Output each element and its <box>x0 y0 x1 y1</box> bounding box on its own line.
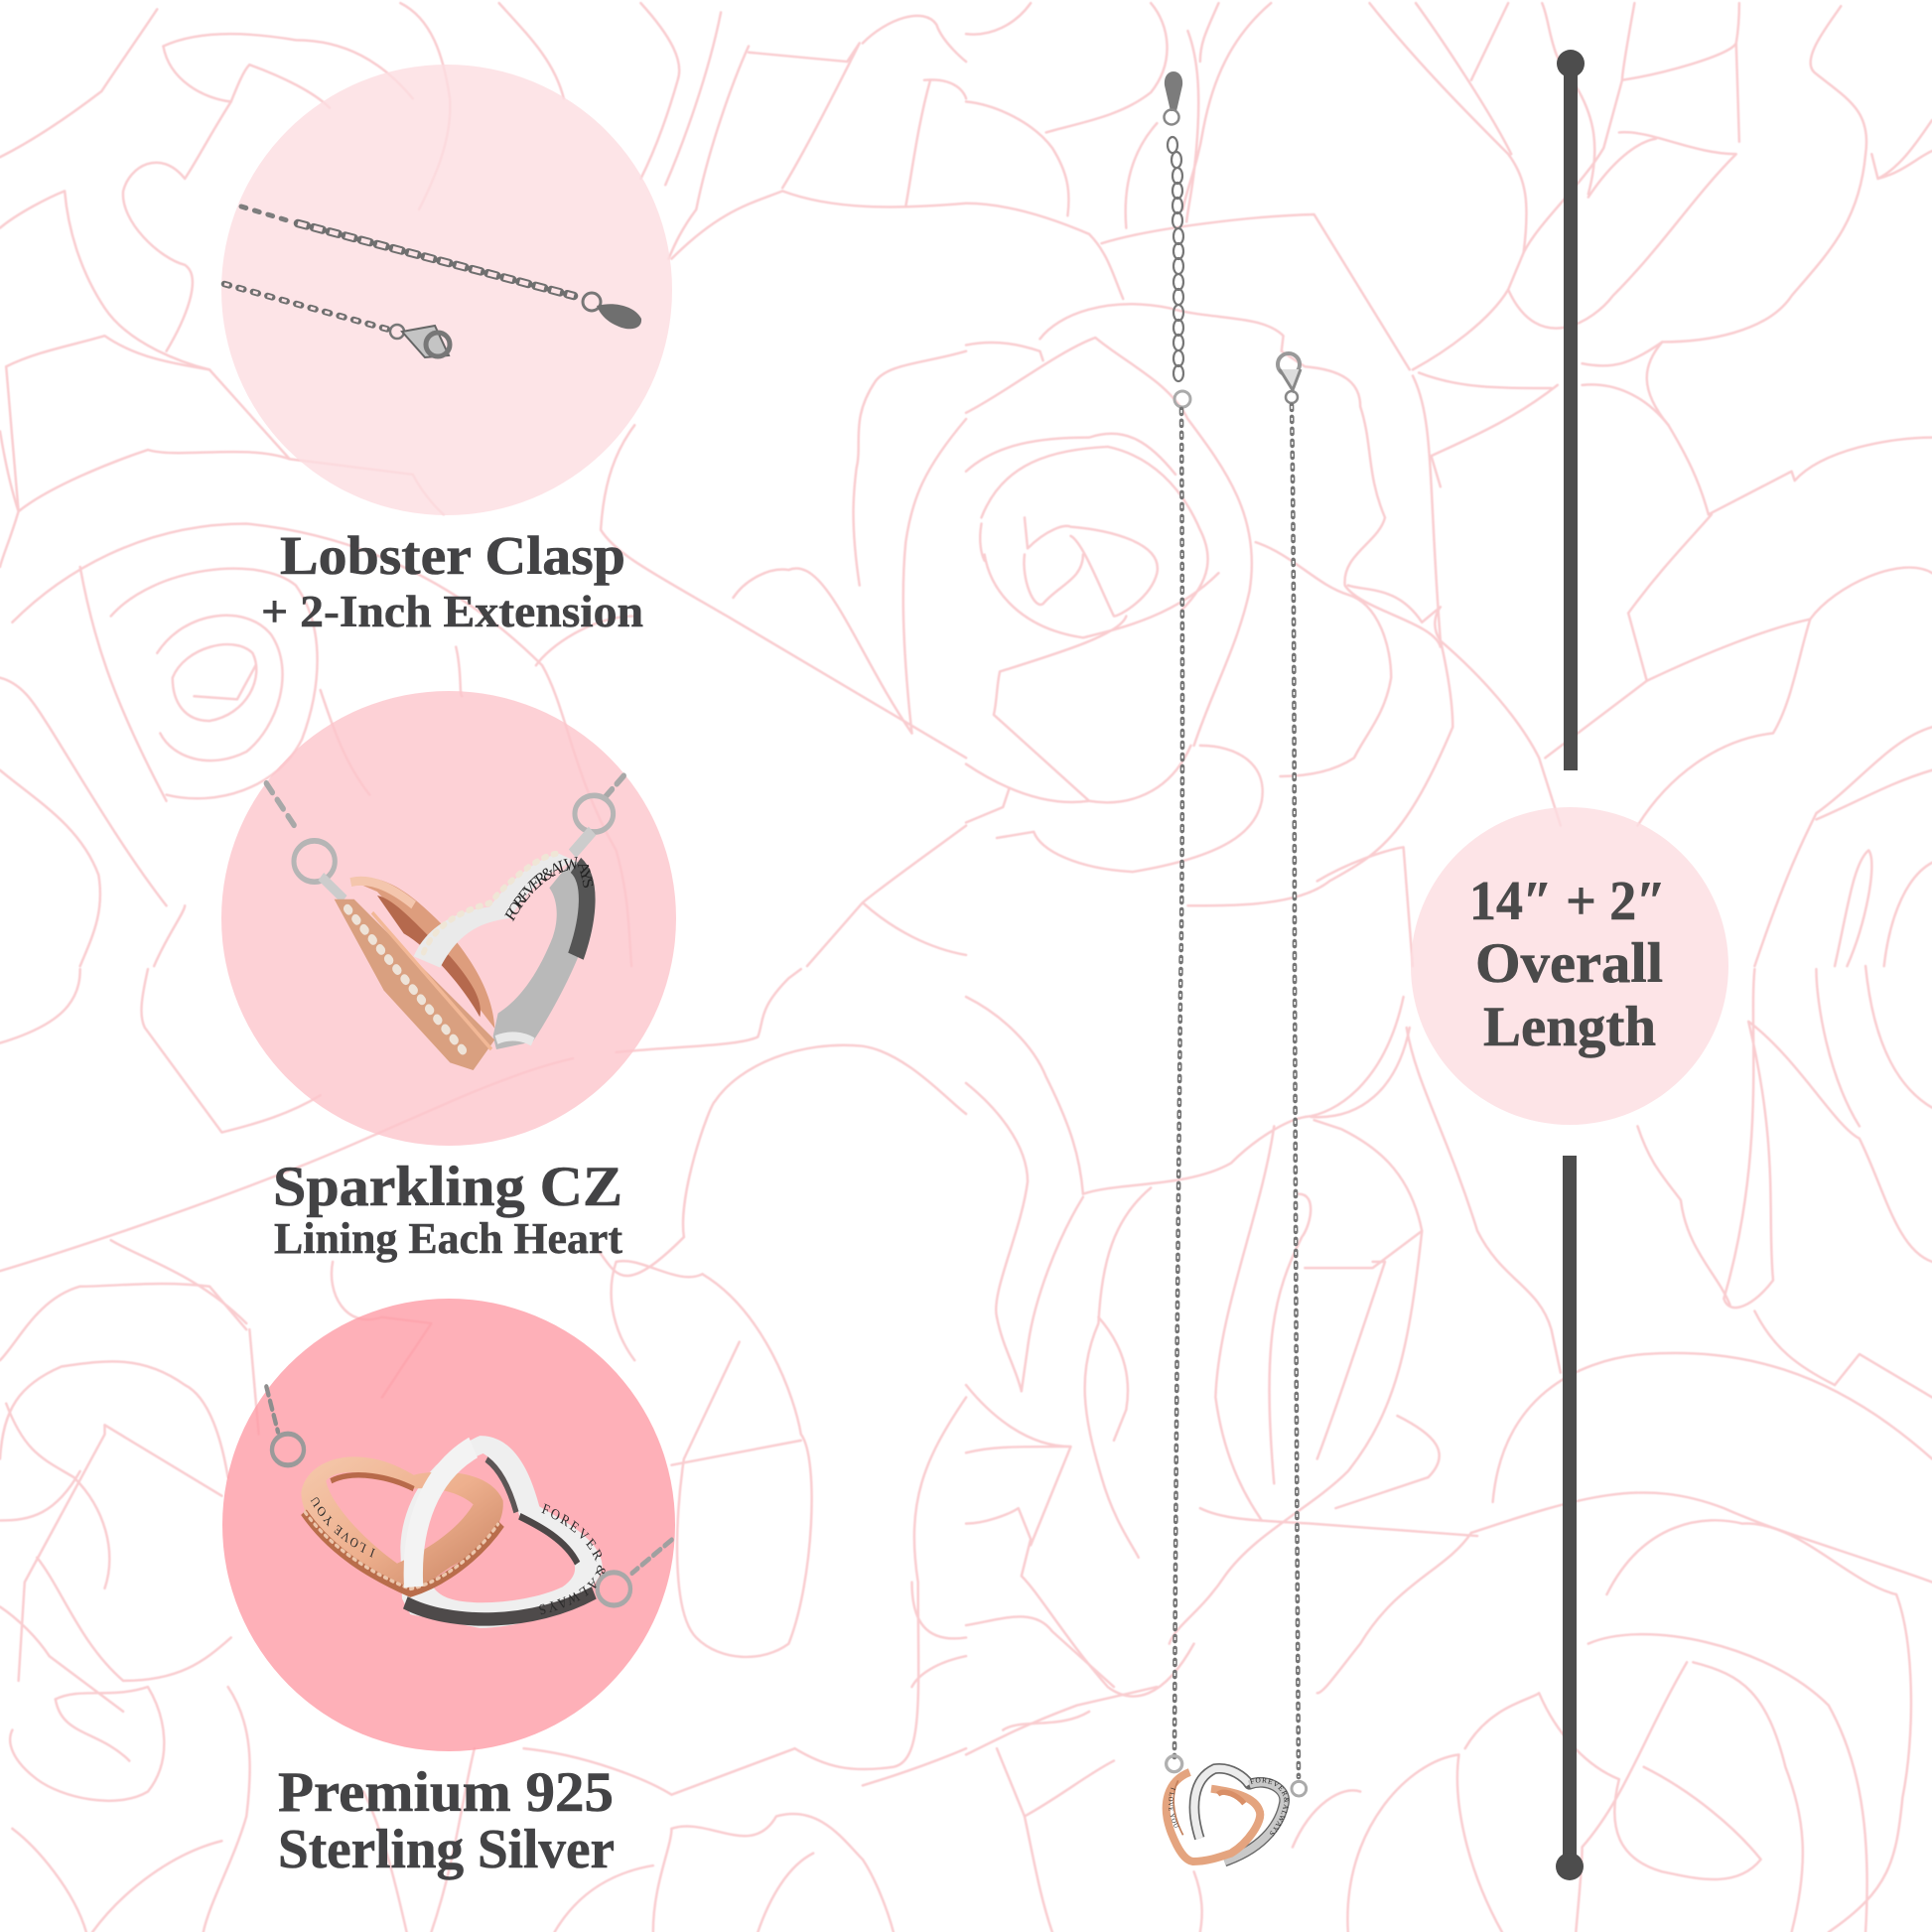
length callout <box>1411 807 1728 1125</box>
icon: pendant side view <box>264 772 626 1070</box>
necklace: full length <box>1162 71 1309 1866</box>
subheading: Lining Each Heart <box>274 1214 622 1263</box>
icon: interlocked hearts front view <box>264 1384 674 1628</box>
heading: Premium 925 <box>278 1761 614 1824</box>
icon: interlocked hearts front view: FOREVER&ALWAYS <box>539 1503 606 1614</box>
chain: extender links <box>1168 137 1183 381</box>
icon: double heart pendant: I LOVE YOU <box>1169 1787 1179 1828</box>
icon: double heart pendant: FOREVER&ALWAYS <box>1249 1777 1289 1837</box>
callout line: 14 + 2 inches: 14″ + 2″ <box>1469 871 1666 932</box>
chain: left strand <box>1174 409 1182 1757</box>
icon: pendant side view: FOREVER&ALWAYS <box>504 857 594 921</box>
callout line: length: Length <box>1483 996 1656 1058</box>
icon: double heart pendant <box>1162 1754 1309 1866</box>
subheading: + 2-Inch Extension <box>261 587 643 636</box>
rose gold heart <box>301 1456 503 1594</box>
icon: lobster clasp <box>1278 353 1301 403</box>
icon: jump ring <box>1174 391 1190 407</box>
icon: lobster clasp chain <box>224 284 450 357</box>
icon: extender ring <box>1164 109 1179 125</box>
circle: pink backdrop <box>221 691 676 1146</box>
chain: right strand <box>1292 405 1299 1777</box>
panel: lobster clasp <box>221 65 672 636</box>
icon: extension chain with tag <box>241 207 641 329</box>
heading: Lobster Clasp <box>280 525 625 586</box>
icon: extender tag <box>1165 71 1182 111</box>
circle: deep pink backdrop <box>222 1299 675 1751</box>
length bar: top <box>1557 50 1585 770</box>
panel: premium 925 <box>222 1299 675 1880</box>
silver heart <box>400 1436 603 1628</box>
length bar: bottom <box>1556 1156 1584 1880</box>
callout line: overall: Overall <box>1475 932 1663 995</box>
silver heart overlap <box>413 1448 474 1587</box>
panel: sparkling cz <box>221 691 676 1263</box>
icon: interlocked hearts front view: I LOVE YOU <box>310 1497 375 1558</box>
circle: callout backdrop <box>1411 807 1728 1125</box>
heading: Sparkling CZ <box>273 1156 622 1218</box>
circle: light pink backdrop <box>221 65 672 515</box>
subheading: Sterling Silver <box>278 1819 615 1880</box>
